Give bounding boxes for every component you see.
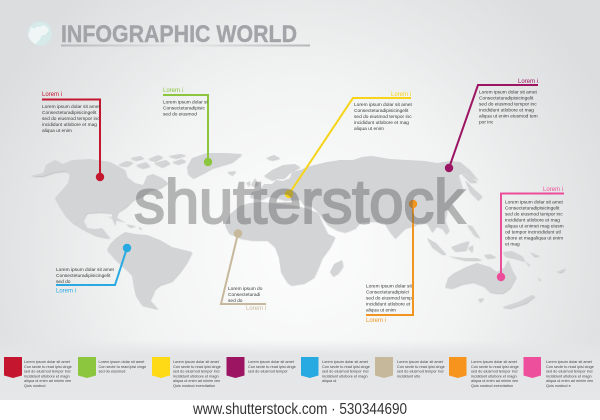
callout: pink: et mag — [505, 242, 520, 248]
legend item: red: sed do eiusmod tempor inci — [24, 370, 71, 374]
callout: blue: Lorem i — [56, 288, 76, 294]
legend item: yellow: Quis nostrud exercitation — [173, 384, 215, 388]
legend item: purple: sed do eiusmod tempor — [248, 370, 288, 374]
legend item: pink — [524, 357, 594, 388]
legend item: red: Con secte tu read ipisi cinge — [24, 365, 72, 369]
callout: purple: sed do eiusmod tempor inc — [479, 102, 537, 108]
scandinavia — [264, 164, 300, 180]
legend item: pink: aliqua ut enim ad minim ven — [546, 379, 593, 383]
callout: green: sed do eiusmod — [163, 112, 197, 118]
title underline — [61, 44, 310, 46]
callout: tan: Lorem ipsum do — [228, 286, 263, 292]
legend item: pink: incididunt utlobore et magn — [546, 374, 592, 378]
greenland — [187, 153, 242, 178]
callout: red — [42, 92, 104, 181]
callout: yellow: sed do eiusmod tempor inc — [354, 114, 412, 120]
callout: orange: Consecteturadipisici — [366, 290, 409, 296]
legend item: yellow: sed do eiusmod tempor inci — [173, 370, 220, 374]
callout: purple: aliqua ut enim eiusmod tem — [479, 114, 538, 120]
callout: blue: Lorem ipsum dolar sit amet — [56, 267, 115, 273]
callout: pink: incididunt utlobore et mag — [505, 218, 560, 224]
africa — [225, 202, 335, 285]
callout: purple: Consecteturadipisicingelit — [479, 96, 534, 102]
callout: red: Consecteturadipisicingelit — [42, 110, 97, 116]
callout: tan: sed do — [228, 298, 243, 304]
legend item: blue: sed do eiusmod tempor inci — [322, 370, 369, 374]
legend item: yellow — [152, 357, 221, 388]
legend item: orange: Lorem ipsum dolar sit amet — [471, 360, 518, 364]
legend item: blue: incididunt utlobore et magn — [322, 374, 368, 378]
legend item: red: Quis nostrud — [24, 384, 46, 388]
legend item: yellow: aliqua ut enim ad minim ven — [173, 379, 220, 383]
callout: green: Lorem ipsum dolar si — [163, 100, 208, 106]
australia — [445, 260, 516, 293]
arctic islands — [118, 154, 280, 186]
callout: tan — [221, 229, 266, 312]
legend item: tan: sed do eiusmod tempor inci — [397, 370, 444, 374]
legend item: blue — [301, 357, 370, 383]
callout: orange: Lorem i — [366, 318, 386, 324]
callout: red: sed do eiusmod tempor inc — [42, 116, 100, 122]
legend item: orange: sed do eiusmod tempor inci — [471, 370, 518, 374]
eurasia — [250, 156, 478, 238]
watermark: shutterstock — [134, 168, 466, 237]
callout: purple: incididunt utlobore et mag — [479, 108, 534, 114]
callout: yellow: incididunt utlobore et mag — [354, 120, 409, 126]
callout: purple: Lorem ipsum dolar sit amet — [479, 90, 538, 96]
legend item: green — [78, 357, 146, 378]
callout: tan: Lorem i — [246, 306, 266, 312]
southeast asia islands — [427, 172, 540, 261]
legend item: green: sed do eiusmod — [98, 370, 125, 374]
legend item: blue: Con secte tu read ipisi cinge — [322, 365, 370, 369]
legend item: blue: aliqua ut — [322, 379, 337, 383]
callout: pink — [497, 187, 564, 281]
legend item: green: Lorem ipsum dolar sit amet — [98, 360, 145, 364]
callout: red: Lorem i — [42, 92, 62, 98]
callout: red: incididunt utlobore et mag — [42, 122, 97, 128]
callout: yellow: aliqua ut enim — [354, 126, 384, 132]
legend item: green: Con secte tu read ipisi cinge — [98, 365, 146, 369]
legend item: purple: Lorem ipsum dolar sit amet — [248, 360, 295, 364]
legend item: yellow: Con secte tu read ipisi cinge — [173, 365, 221, 369]
legend item: orange: aliqua ut enim ad minim ven — [471, 379, 518, 383]
north america — [30, 159, 168, 238]
legend item: blue: Lorem ipsum dolar sit amet — [322, 360, 369, 364]
legend item: tan: Lorem ipsum dolar sit amet — [397, 360, 444, 364]
callout: purple: Lorem i — [518, 79, 538, 85]
legend item: orange: Quis nostrud exercitation — [471, 384, 513, 388]
legend item: tan: incididunt utlo — [397, 374, 420, 378]
footer band — [0, 340, 600, 400]
legend item: purple: Con secte tu read ipisi cinge — [248, 365, 296, 369]
callout: purple: por inc — [479, 120, 494, 126]
callout: blue: sed do — [56, 279, 71, 285]
title: INFOGRAPHIC WORLD — [61, 21, 297, 48]
callout: red: aliqua ut enim — [42, 128, 72, 134]
callout: red: Lorem ipsum dolar sit amet — [42, 104, 101, 110]
callout: pink: Lorem i — [543, 187, 563, 193]
madagascar — [330, 260, 343, 276]
callout: yellow — [285, 92, 413, 198]
world map — [30, 153, 566, 309]
legend item: tan — [375, 357, 445, 378]
callout: yellow: Lorem i — [391, 92, 411, 98]
legend item: yellow: Lorem ipsum dolar sit amet — [173, 360, 220, 364]
callout: pink: aliqua ut enimet mag eiusm — [505, 224, 564, 230]
legend item: red: aliqua ut enim ad minim ven — [24, 379, 71, 383]
callout: green — [163, 88, 212, 166]
footer credit: www.shutterstock.com · 530344690 — [192, 401, 407, 418]
south america — [107, 232, 192, 309]
callout: tan: Consecteturadi — [228, 292, 260, 298]
legend item: pink: sed do eiusmod tempor inci — [546, 370, 593, 374]
callout: purple — [445, 79, 538, 172]
legend item: yellow: incididunt utlobore et magn — [173, 374, 219, 378]
callout: pink: sed do eiusmod tempor inc — [505, 212, 563, 218]
legend item: pink: Quis nostrud e — [546, 384, 571, 388]
callout: yellow: Lorem ipsum dolar sit amet — [354, 102, 413, 108]
callout: green: Lorem i — [163, 88, 183, 94]
callout: pink: obore et magaliqua ut enim — [505, 236, 563, 242]
callout: blue — [56, 244, 131, 294]
callout: pink: Lorem ipsum dolar sit amet — [505, 200, 564, 206]
icon: globe — [28, 22, 52, 46]
callout: orange: Lorem ipsum dolar sit — [366, 284, 413, 290]
legend item: purple — [226, 357, 296, 378]
callout: yellow: Consecteturadipisicingelit — [354, 108, 409, 114]
legend item: red — [4, 357, 72, 388]
callout: orange: sed do eiusmod temp — [366, 296, 412, 302]
caribbean — [107, 216, 142, 229]
legend item: pink: Con secte tu read ipisi cinge — [546, 365, 594, 369]
legend item: tan: Con secte tu read ipisi cinge — [397, 365, 445, 369]
legend item: red: incididunt utlobore et magn — [24, 374, 70, 378]
legend item: orange: Con secte tu read ipisi cinge — [471, 365, 519, 369]
legend item: red: Lorem ipsum dolar sit amet — [24, 360, 71, 364]
tasmania and new zealand — [478, 261, 566, 308]
callout: pink: Consecteturadipisicingelit — [505, 206, 560, 212]
legend item: orange — [449, 357, 519, 388]
callout: pink: od tempor incincididunt utl — [505, 230, 561, 236]
callout: blue: Consecteturadipisicingelit — [56, 273, 111, 279]
legend item: orange: incididunt utlobore et magn — [471, 374, 517, 378]
callout: orange: incididunt utlobore et — [366, 302, 411, 308]
callout: orange — [366, 200, 417, 324]
callout: green: Consecteturadipisic — [163, 106, 205, 112]
legend item: pink: Lorem ipsum dolar sit amet — [546, 360, 593, 364]
callout: orange: aliqua ut enim — [366, 308, 396, 314]
